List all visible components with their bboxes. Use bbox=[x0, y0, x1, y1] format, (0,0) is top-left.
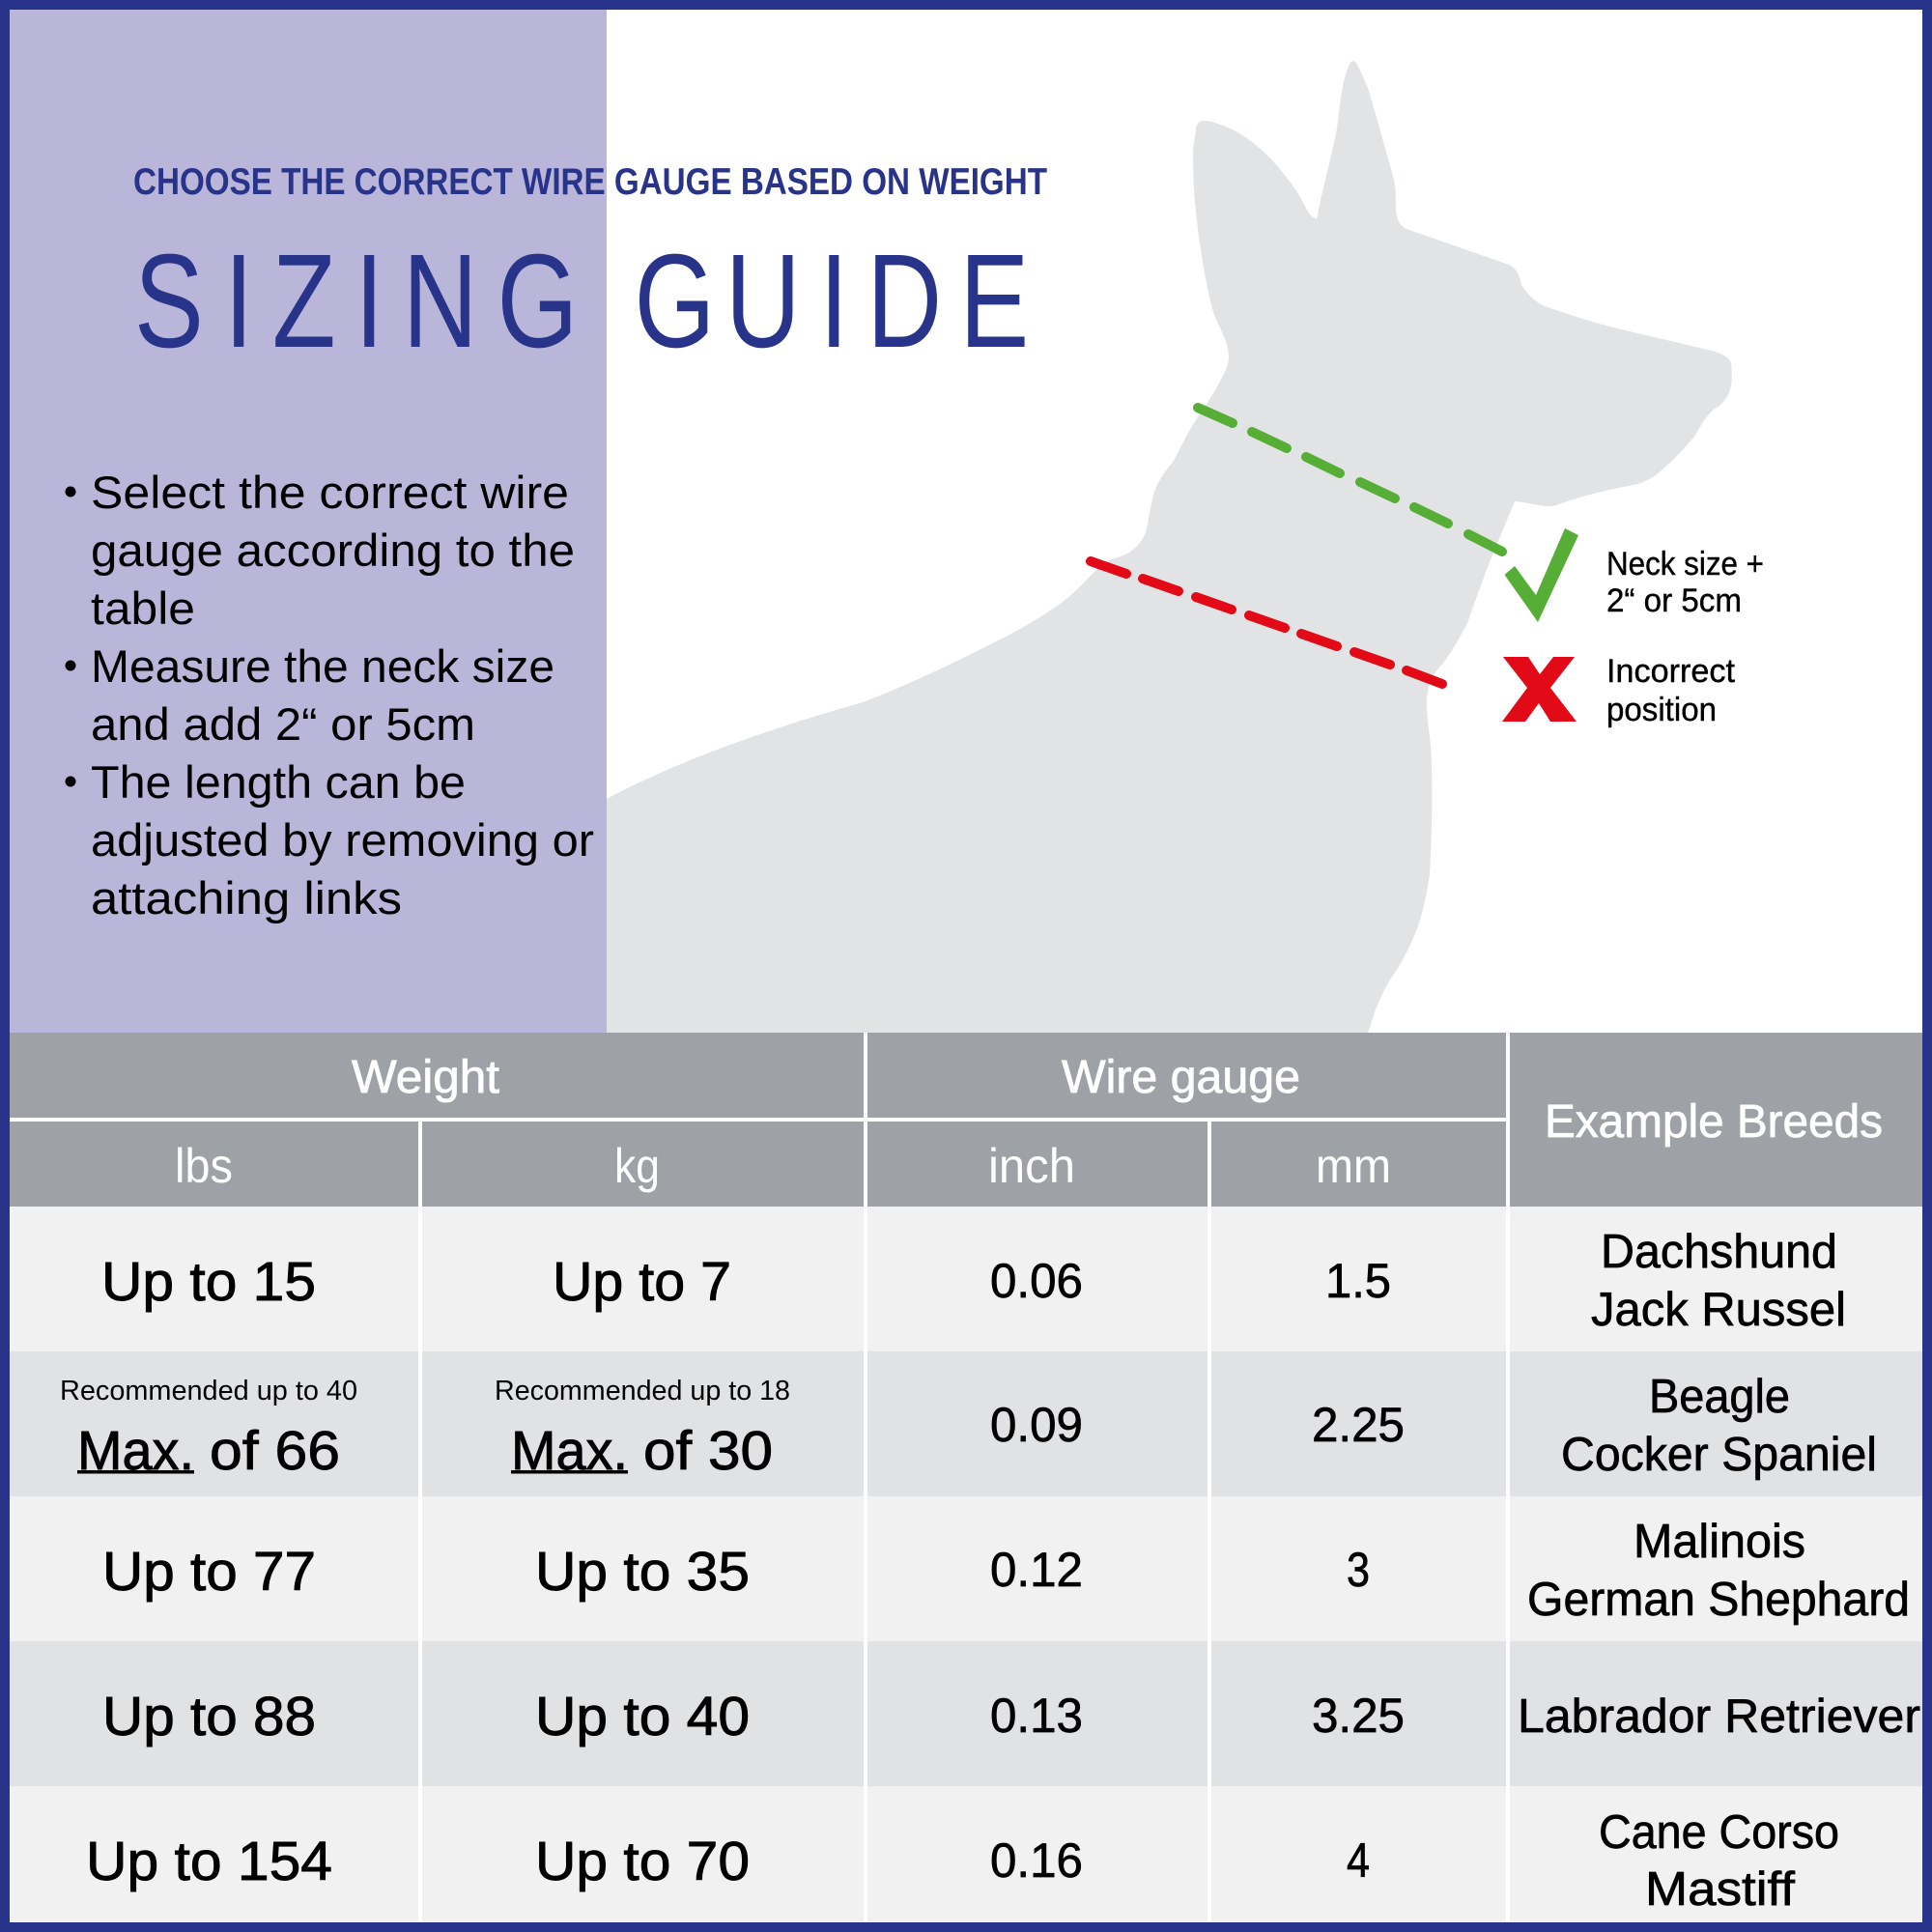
subheader: lbs: lbs bbox=[175, 1139, 233, 1193]
bullet 3: adjusted by removing or bbox=[91, 814, 594, 866]
row 2: Beagle bbox=[1649, 1371, 1790, 1423]
icon: green check mark bbox=[1505, 528, 1578, 622]
legend: correct position bbox=[1606, 546, 1764, 619]
row 3: 3 bbox=[1347, 1543, 1370, 1597]
row 2: Max. bbox=[511, 1420, 628, 1482]
bullet 3: attaching links bbox=[91, 872, 402, 923]
row 2: Recommended up to 40 bbox=[60, 1376, 357, 1406]
bullet 2: and add 2“ or 5cm bbox=[91, 698, 475, 750]
row 5: Cane Corso bbox=[1599, 1806, 1839, 1859]
row 4: 3.25 bbox=[1312, 1689, 1405, 1743]
row 4 bbox=[102, 1686, 1920, 1747]
legend: correct position: Neck size + bbox=[1606, 546, 1764, 582]
row 3: German Shephard bbox=[1527, 1574, 1910, 1626]
bullet 2 bbox=[66, 640, 554, 750]
row 2: Max. bbox=[77, 1420, 194, 1482]
panel: instructions background bbox=[10, 10, 607, 1034]
row 5: 4 bbox=[1347, 1833, 1370, 1888]
sizing table bbox=[10, 1033, 1922, 1922]
table header background bbox=[10, 1033, 1922, 1207]
bullet 1 bbox=[66, 467, 575, 634]
row 5: Up to 70 bbox=[535, 1831, 750, 1892]
header: weight: Weight bbox=[352, 1052, 499, 1103]
row 5 bbox=[86, 1806, 1839, 1916]
icon: red cross bbox=[1502, 657, 1577, 722]
row 4: Up to 40 bbox=[535, 1686, 750, 1747]
legend: incorrect position: position bbox=[1606, 692, 1717, 728]
row 5: Up to 154 bbox=[86, 1831, 332, 1892]
subheader: inch: inch bbox=[988, 1139, 1075, 1193]
row 2: of 30 bbox=[643, 1420, 773, 1482]
row 1 bbox=[101, 1226, 1846, 1336]
header: wire gauge: Wire gauge bbox=[1062, 1052, 1300, 1103]
row 2: Cocker Spaniel bbox=[1561, 1429, 1877, 1481]
title: SIZING GUIDE bbox=[134, 227, 1029, 376]
row 2: 2.25 bbox=[1312, 1398, 1405, 1452]
bullet 1: table bbox=[91, 582, 195, 634]
row 3: Up to 35 bbox=[535, 1541, 750, 1603]
row 1: Jack Russel bbox=[1591, 1284, 1846, 1336]
row 1: Up to 7 bbox=[553, 1251, 731, 1313]
row 3: Malinois bbox=[1634, 1516, 1805, 1568]
header: example breeds: Example Breeds bbox=[1545, 1096, 1883, 1148]
subheader: kg: kg bbox=[614, 1139, 660, 1193]
bullet 3 bbox=[66, 756, 594, 923]
row 1: 0.06 bbox=[990, 1254, 1083, 1308]
row 2 bbox=[60, 1371, 1877, 1482]
row 3: 0.12 bbox=[990, 1543, 1083, 1597]
row 5: 0.16 bbox=[990, 1833, 1083, 1888]
bullet 3: The length can be bbox=[91, 756, 466, 808]
row 2: of 66 bbox=[210, 1420, 340, 1482]
legend: correct position: 2“ or 5cm bbox=[1606, 582, 1742, 619]
row 1: 1.5 bbox=[1325, 1254, 1391, 1308]
subheader: mm: mm bbox=[1316, 1139, 1391, 1193]
red dashed incorrect line bbox=[1091, 561, 1442, 684]
row 3: Up to 77 bbox=[102, 1541, 316, 1603]
row 4: Labrador Retriever bbox=[1518, 1690, 1920, 1743]
row 2: 0.09 bbox=[990, 1398, 1083, 1452]
table rows background bbox=[10, 1207, 1922, 1922]
bullet 2: Measure the neck size bbox=[91, 640, 554, 692]
row 5: Mastiff bbox=[1645, 1863, 1795, 1916]
row 2: Recommended up to 18 bbox=[495, 1376, 790, 1406]
legend: incorrect position: Incorrect bbox=[1606, 653, 1736, 690]
row 1: Dachshund bbox=[1601, 1226, 1837, 1278]
green dashed neck line bbox=[1198, 408, 1502, 552]
row 4: Up to 88 bbox=[102, 1686, 316, 1747]
row 4: 0.13 bbox=[990, 1689, 1083, 1743]
bullet 1: Select the correct wire bbox=[91, 467, 569, 518]
legend: incorrect position bbox=[1606, 653, 1736, 728]
dog silhouette bbox=[607, 61, 1732, 1036]
row 1: Up to 15 bbox=[101, 1251, 316, 1313]
instructions list bbox=[66, 467, 594, 923]
bullet 1: gauge according to the bbox=[91, 525, 575, 576]
row 3 bbox=[102, 1516, 1910, 1626]
eyebrow heading: CHOOSE THE CORRECT WIRE GAUGE BASED ON WEIGHT bbox=[133, 161, 1047, 203]
